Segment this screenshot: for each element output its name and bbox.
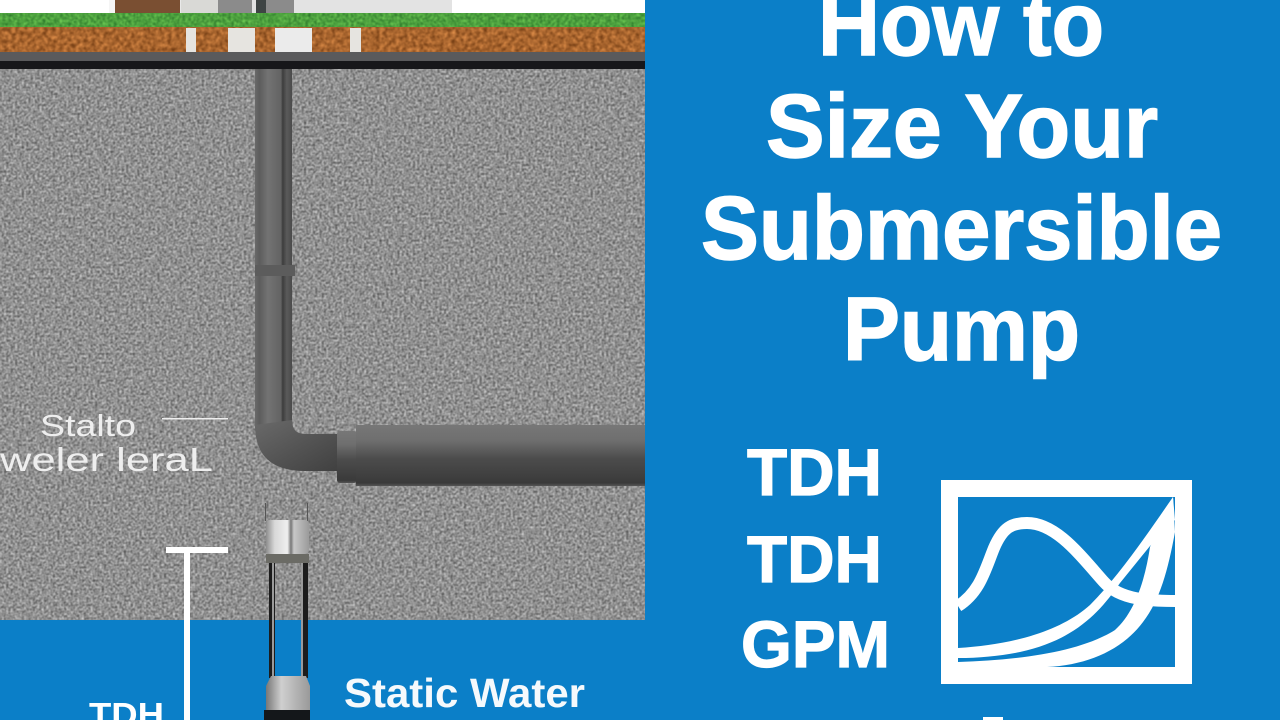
- rising curve upper: [958, 497, 1175, 658]
- large horizontal pipe: [356, 425, 645, 486]
- hump curve: [958, 523, 1176, 606]
- soil layer: [0, 27, 645, 52]
- pump motor body: [264, 710, 310, 720]
- title: Pump: [843, 280, 1080, 380]
- pipe system: [255, 69, 645, 486]
- title: [701, 0, 1222, 380]
- dark slab under soil: [0, 52, 645, 69]
- static water label: Static Water: [344, 670, 585, 716]
- house base at ground level: [109, 0, 452, 14]
- title: Size Your: [766, 77, 1158, 177]
- white blocks in soil: [186, 28, 361, 52]
- sky background: [0, 0, 645, 14]
- pump motor collar: [266, 676, 310, 711]
- metric labels: [741, 435, 890, 681]
- cropped mark at bottom edge: [983, 717, 1003, 720]
- rising curve lower wedge: [958, 497, 1175, 667]
- coupling collar: [337, 431, 357, 483]
- grass layer: [0, 13, 645, 27]
- static water level label: [0, 408, 228, 478]
- concrete ground: [0, 69, 645, 620]
- pipe elbow: [255, 420, 342, 471]
- metric labels: TDH: [747, 435, 882, 509]
- static water level label: weler leraL: [0, 441, 213, 478]
- water band: [0, 620, 645, 720]
- pipe coupling: [255, 265, 295, 276]
- right blue panel: [645, 0, 1280, 720]
- submersible pump: [264, 503, 310, 720]
- vertical pipe: [255, 69, 292, 430]
- pump performance chart icon: [950, 488, 1184, 676]
- TDH measurement marker: [166, 547, 228, 720]
- pump head: [266, 520, 309, 554]
- metric labels: TDH: [747, 522, 882, 596]
- pump rods: [269, 563, 275, 678]
- metric labels: GPM: [741, 607, 890, 681]
- static water level label: Stalto: [40, 408, 136, 443]
- title: Submersible: [701, 179, 1222, 279]
